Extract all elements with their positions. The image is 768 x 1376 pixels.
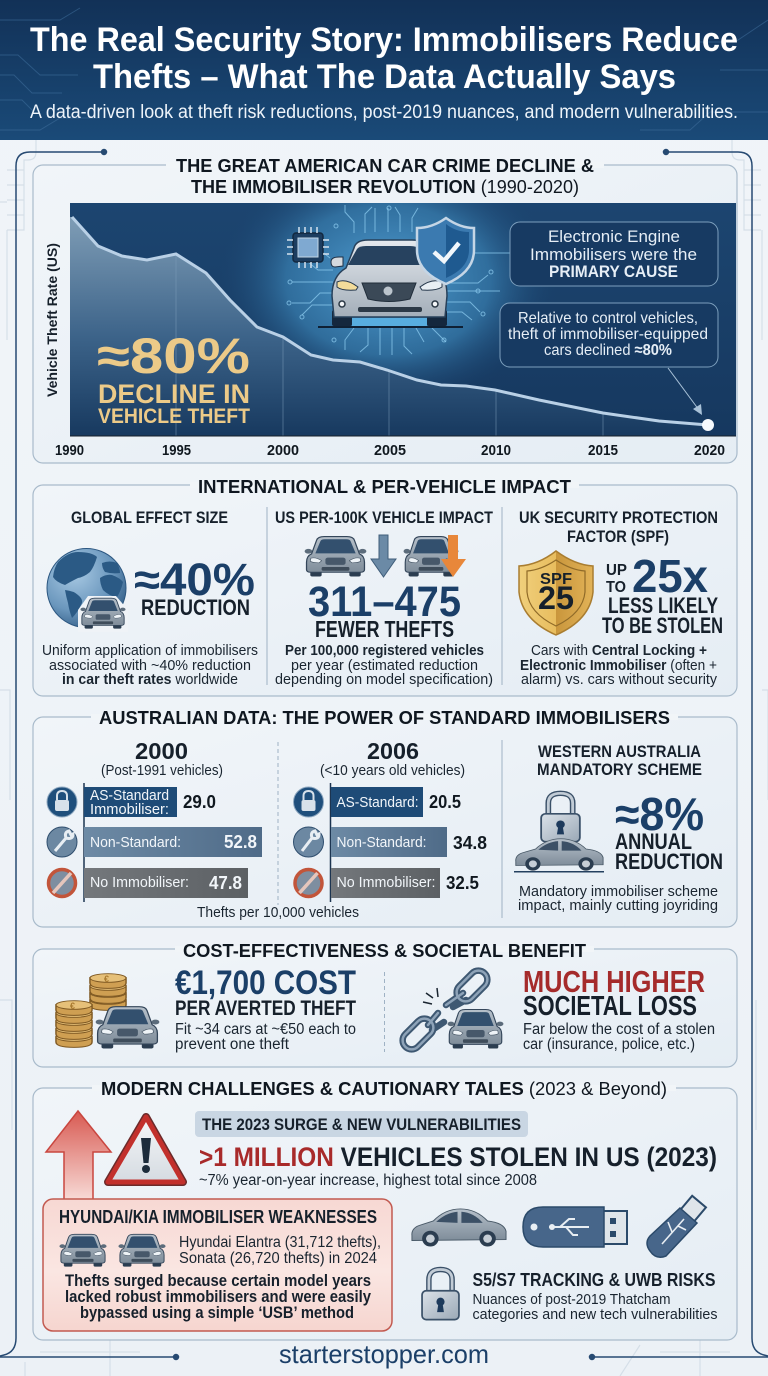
bar chart: 2000: Immobiliser: — [90, 801, 169, 818]
callout: control vehicles: theft of immobiliser-equipped — [508, 326, 708, 343]
callout: control vehicles: cars declined ≈80% — [544, 342, 672, 359]
heading: modern challenges: MODERN CHALLENGES & CAUTIONARY TALES (2023 & Beyond) — [101, 1078, 667, 1099]
heading: international: INTERNATIONAL & PER-VEHICLE IMPACT — [198, 476, 572, 497]
bar chart: 2006: 34.8 — [453, 833, 487, 853]
y axis label: Vehicle Theft Rate (US) — [44, 243, 60, 397]
bar chart: 2006: AS-Standard: — [336, 794, 418, 811]
icon: circuit traces — [292, 205, 510, 355]
column: western australia: impact, mainly cutting joyriding — [518, 897, 718, 914]
column: us per-100k: depending on model specification) — [275, 671, 493, 688]
panel: international impact — [33, 476, 737, 696]
column: uk spf — [519, 509, 723, 688]
panel: modern challenges — [33, 1078, 737, 1340]
column: uk spf: alarm) vs. cars without security — [521, 671, 717, 688]
column: uk spf: FACTOR (SPF) — [567, 528, 669, 546]
title: Thefts – What The Data Actually Says — [93, 58, 676, 96]
icon: padlock — [422, 1269, 459, 1320]
icon: side car — [412, 1209, 506, 1247]
bar chart: 2006: 32.5 — [446, 873, 479, 893]
bar chart: 2000: 52.8 — [224, 832, 257, 852]
icon: gold shield spf 25: 25 — [538, 580, 574, 616]
x axis years: 2005 — [374, 442, 406, 459]
big stat: 80 percent decline: VEHICLE THEFT — [98, 405, 250, 428]
column: uk spf: TO BE STOLEN — [602, 613, 723, 638]
bar chart: 2006: 2006 — [367, 738, 419, 764]
bar chart: 2006: No Immobiliser: — [336, 874, 436, 891]
stat: one million vehicles — [199, 1142, 717, 1189]
icon: padlock with car — [514, 793, 604, 872]
chart: vehicle theft rate line — [70, 203, 736, 436]
icon: coins and car: € — [104, 974, 109, 984]
big stat: 80 percent decline: DECLINE IN — [98, 379, 250, 409]
x axis years: 2010 — [481, 442, 511, 459]
big stat: 80 percent decline — [97, 328, 250, 428]
icon: gold shield spf 25 — [519, 551, 593, 635]
icon: usb stick diagonal — [647, 1196, 706, 1257]
column: uk spf: UK SECURITY PROTECTION — [519, 509, 718, 527]
column: us per-100k: per year (estimated reduction — [291, 657, 478, 674]
column: uk spf: LESS LIKELY — [608, 593, 718, 618]
column: us per-100k — [275, 509, 493, 688]
big stat: 80 percent decline: ≈80% — [97, 328, 250, 384]
societal loss stat: SOCIETAL LOSS — [523, 990, 697, 1021]
x axis years — [55, 442, 725, 459]
banner: 2023 surge — [195, 1111, 528, 1137]
bar chart: 2000: No Immobiliser: — [90, 874, 189, 891]
title: The Real Security Story: Immobilisers Reduce — [30, 21, 738, 59]
panel: cost-effectiveness — [33, 940, 737, 1067]
icon: lock badge 2006 — [294, 787, 324, 817]
bar chart: 2006: 20.5 — [429, 792, 461, 812]
callout: hyundai kia weaknesses: Hyundai Elantra (31,712 thefts), — [179, 1234, 381, 1251]
column: uk spf: Electronic Immobiliser (often + — [520, 657, 717, 674]
callout: hyundai kia weaknesses: Sonata (26,720 thefts) in 2024 — [179, 1250, 377, 1267]
column: us per-100k: US PER-100K VEHICLE IMPACT — [275, 509, 493, 527]
icon: two cars — [59, 1234, 166, 1267]
icon: shield with check — [417, 218, 474, 284]
column: global effect size: associated with ~40% reduction — [49, 657, 251, 674]
footer url: starterstopper.com — [279, 1339, 489, 1369]
callout: control vehicles — [500, 303, 718, 367]
icon: prohibited badge 2006 — [295, 870, 322, 896]
callout: primary cause — [510, 222, 718, 286]
text: tracking and uwb risks — [472, 1270, 718, 1323]
banner: 2023 surge: THE 2023 SURGE & NEW VULNERABILITIES — [202, 1115, 521, 1134]
icon: key badge 2006 — [294, 827, 324, 857]
column: western australia: Mandatory immobiliser scheme — [519, 883, 718, 900]
column: uk spf: Cars with Central Locking + — [531, 642, 707, 659]
heading: decline: THE IMMOBILISER REVOLUTION (1990-2020) — [191, 176, 579, 197]
column: uk spf: TO — [606, 579, 626, 596]
bar chart: 2000: (Post-1991 vehicles) — [101, 762, 223, 779]
cost stat: PER AVERTED THEFT — [175, 997, 356, 1020]
column: global effect size: Uniform application of immobilisers — [42, 642, 258, 659]
icon: cars with down arrows — [305, 535, 466, 577]
column: western australia: MANDATORY SCHEME — [537, 761, 702, 779]
icon: microchip — [287, 227, 329, 268]
callout: primary cause: Immobilisers were the — [530, 245, 697, 264]
header band — [0, 0, 768, 140]
arrow: to end point — [668, 368, 702, 415]
column: us per-100k: Per 100,000 registered vehicles — [285, 642, 484, 659]
callout: hyundai kia weaknesses: bypassed using a simple ‘USB’ method — [80, 1304, 354, 1322]
icon: lock badge — [47, 787, 77, 817]
column: western australia — [514, 743, 723, 914]
column: global effect size: REDUCTION — [141, 595, 250, 620]
icon: prohibited badge — [48, 870, 76, 896]
column: us per-100k: 311–475 — [308, 578, 461, 626]
icon: globe with car — [47, 548, 128, 632]
bar chart: 2006: Non-Standard: — [336, 834, 426, 851]
subtitle: A data-driven look at theft risk reductions, post-2019 nuances, and modern vulnerabilities. — [30, 102, 738, 123]
title — [30, 21, 738, 96]
x axis years: 2020 — [694, 442, 725, 459]
icon: usb key — [523, 1207, 627, 1247]
cost stat: €1,700 COST — [175, 964, 356, 1002]
column: western australia: REDUCTION — [615, 849, 723, 874]
chart unit note: Thefts per 10,000 vehicles — [197, 904, 359, 921]
bar chart: 2006 — [294, 738, 487, 902]
column: western australia: ANNUAL — [615, 829, 692, 854]
callout: primary cause: PRIMARY CAUSE — [549, 262, 678, 281]
societal loss stat: Far below the cost of a stolen — [523, 1021, 715, 1038]
column: uk spf: 25x — [632, 550, 708, 602]
heading: decline — [166, 155, 604, 197]
cost stat — [175, 964, 356, 1053]
bar chart: 2006: (<10 years old vehicles) — [320, 762, 465, 779]
bar chart: 2000 — [47, 738, 262, 902]
cost stat: prevent one theft — [175, 1036, 290, 1053]
panel: australian data — [33, 707, 737, 927]
icon: hero car — [318, 240, 463, 328]
x axis years: 1995 — [162, 442, 191, 459]
icon: coins and car: € — [70, 1001, 75, 1011]
heading: decline: THE GREAT AMERICAN CAR CRIME DECLINE & — [176, 155, 594, 176]
arrow: red upward — [46, 1111, 111, 1201]
column: us per-100k: FEWER THEFTS — [315, 616, 454, 642]
callout: hyundai kia weaknesses: lacked robust immobilisers and were easily — [65, 1288, 372, 1306]
callout: control vehicles: Relative to control vehicles, — [518, 310, 698, 327]
bar chart: 2000: Non-Standard: — [90, 834, 181, 851]
heading: australian: AUSTRALIAN DATA: THE POWER OF STANDARD IMMOBILISERS — [99, 707, 670, 728]
column: uk spf: UP — [606, 562, 627, 579]
bar chart: 2000: 29.0 — [183, 792, 216, 812]
bar chart: 2000: 2000 — [135, 738, 188, 764]
bar chart: 2000: 47.8 — [209, 873, 242, 893]
callout: hyundai kia weaknesses: Thefts surged because certain model years — [65, 1272, 371, 1290]
text: tracking and uwb risks: categories and new tech vulnerabilities — [472, 1306, 718, 1323]
column: western australia: WESTERN AUSTRALIA — [538, 743, 701, 761]
callout: hyundai kia weaknesses — [43, 1199, 392, 1331]
column: global effect size: in car theft rates worldwide — [62, 671, 238, 688]
icon: warning triangle — [108, 1117, 183, 1182]
stat: one million vehicles: >1 MILLION VEHICLES STOLEN IN US (2023) — [199, 1142, 717, 1172]
cost stat: Fit ~34 cars at ~€50 each to — [175, 1021, 356, 1038]
column: global effect size: ≈40% — [134, 554, 255, 605]
x axis years: 2000 — [267, 442, 299, 459]
heading: cost-effectiveness: COST-EFFECTIVENESS & SOCIETAL BENEFIT — [183, 940, 587, 961]
societal loss stat: MUCH HIGHER — [523, 964, 705, 999]
callout: primary cause: Electronic Engine — [548, 227, 680, 246]
icon: broken chain and car — [399, 967, 503, 1053]
bar chart: 2000: AS-Standard — [90, 787, 169, 804]
text: tracking and uwb risks: Nuances of post-2019 Thatcham — [472, 1291, 670, 1308]
societal loss stat: car (insurance, police, etc.) — [523, 1036, 695, 1053]
x axis years: 2015 — [588, 442, 618, 459]
column: global effect size — [42, 509, 258, 688]
icon: gold shield spf 25: SPF — [540, 571, 572, 588]
panel: great american car crime decline — [33, 155, 737, 463]
societal loss stat — [523, 964, 715, 1053]
column: global effect size: GLOBAL EFFECT SIZE — [71, 509, 228, 527]
x axis years: 1990 — [55, 442, 84, 459]
text: tracking and uwb risks: S5/S7 TRACKING & UWB RISKS — [472, 1270, 716, 1290]
column: western australia: ≈8% — [615, 788, 704, 840]
end point — [702, 419, 714, 431]
icon: coins and car — [56, 974, 159, 1048]
callout: hyundai kia weaknesses: HYUNDAI/KIA IMMOBILISER WEAKNESSES — [59, 1207, 377, 1227]
stat: one million vehicles: ~7% year-on-year increase, highest total since 2008 — [199, 1172, 537, 1189]
icon: wrench badge — [47, 827, 77, 857]
